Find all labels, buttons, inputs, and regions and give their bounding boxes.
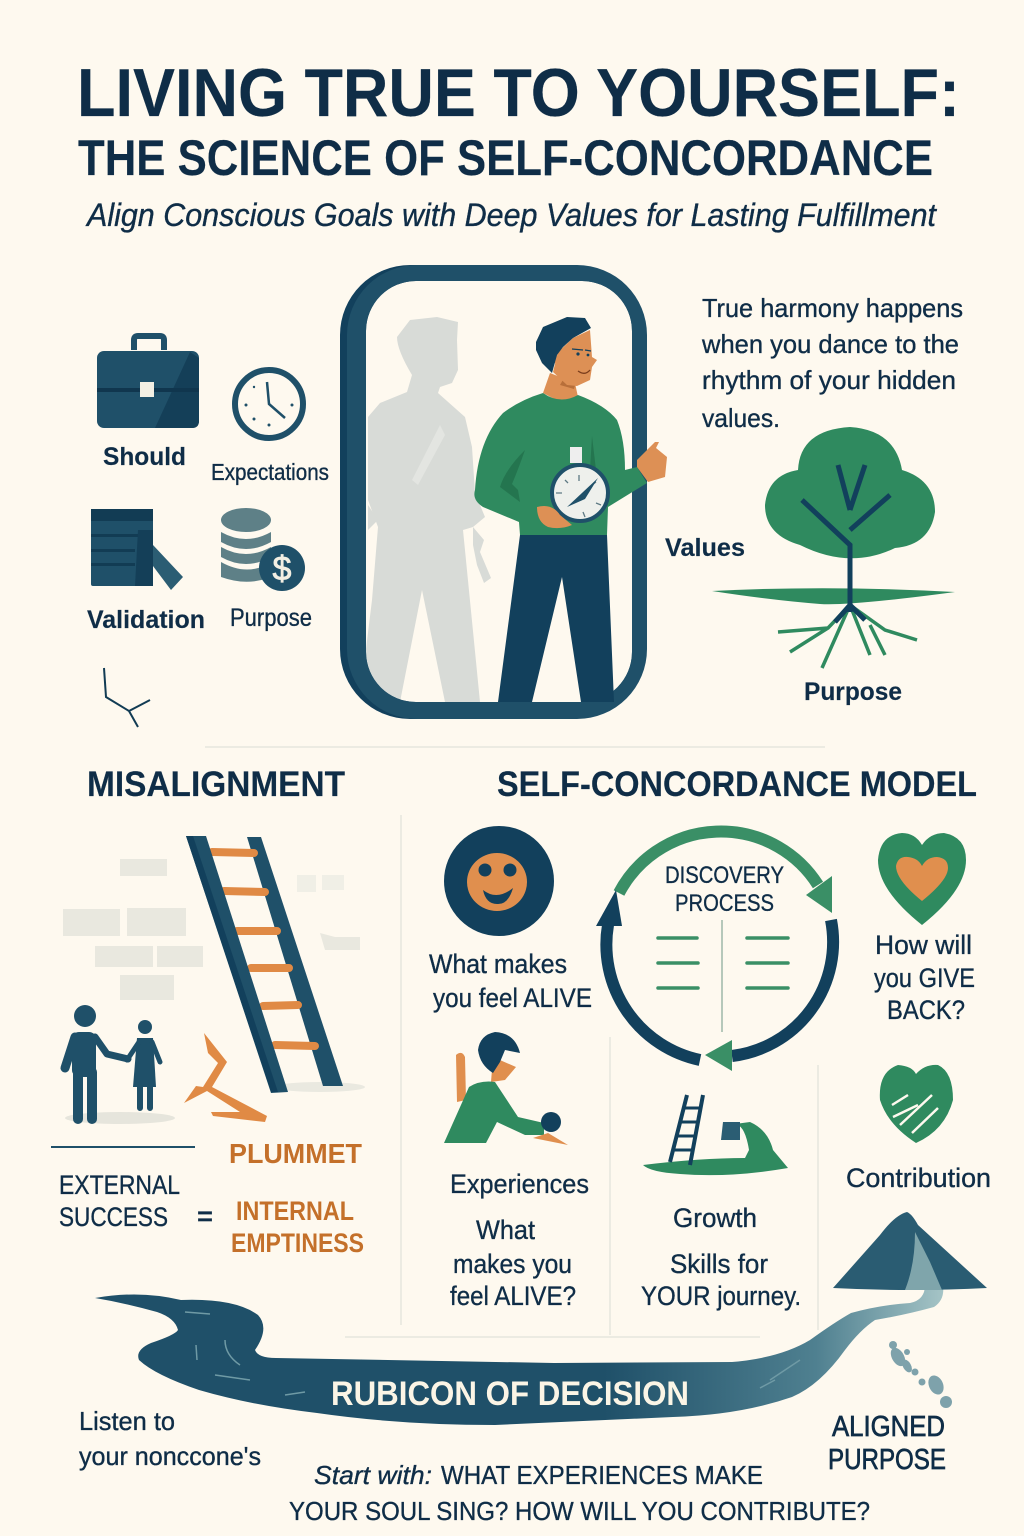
closing prompt: Start with: [314, 1460, 432, 1490]
equation: external success equals internal emptiness [51, 1138, 364, 1258]
discovery cycle [596, 831, 833, 1071]
label: validation: Validation [87, 606, 205, 634]
river: rubicon of decision [95, 1285, 943, 1425]
label: aligned purpose: ALIGNED [832, 1411, 945, 1443]
title: LIVING TRUE TO YOURSELF: [77, 55, 960, 131]
text: what makes you feel alive: What makes [429, 949, 567, 979]
text: how will you give back: you GIVE [874, 963, 975, 993]
icon: briefcase [97, 336, 199, 428]
icon: people holding hands [65, 1005, 175, 1124]
icon: crack [104, 668, 150, 727]
mirror frame [340, 265, 647, 719]
text: harmony quote [701, 293, 963, 433]
text: growth [641, 1203, 801, 1311]
sweater [474, 393, 647, 535]
icon: person exploring [444, 1032, 568, 1145]
equation: external success equals internal emptiness: INTERNAL [236, 1196, 354, 1226]
discovery cycle: DISCOVERY [665, 862, 784, 889]
icon: tree with roots [712, 427, 955, 668]
river: rubicon of decision: RUBICON OF DECISION [331, 1375, 689, 1413]
text: listen to your nonccone's: Listen to [79, 1406, 175, 1436]
icon: ladder [186, 836, 365, 1093]
text: experiences: What [476, 1215, 535, 1245]
icon: mountain [833, 1212, 987, 1290]
text: harmony quote: when you dance to the [701, 329, 959, 359]
icon: validation document [91, 509, 183, 590]
heading: model: SELF-CONCORDANCE MODEL [497, 765, 977, 804]
text: experiences: feel ALIVE? [450, 1281, 576, 1311]
text: what makes you feel alive: you feel ALIVE [433, 983, 592, 1013]
icon: caring hands [880, 1065, 953, 1143]
label: aligned purpose: PURPOSE [828, 1444, 946, 1476]
man [474, 317, 667, 702]
mirror with figures [340, 265, 667, 719]
subtitle: Align Conscious Goals with Deep Values for Lasting Fulfillment [85, 197, 937, 233]
equation: external success equals internal emptiness: EXTERNAL [59, 1170, 180, 1200]
icon: coins: $ [273, 550, 292, 588]
text: experiences [450, 1169, 589, 1311]
label: should: Should [103, 443, 186, 471]
compass [570, 447, 582, 463]
blue arcs [732, 920, 833, 1056]
heading: misalignment: MISALIGNMENT [87, 765, 345, 804]
text: listen to your nonccone's [79, 1406, 261, 1471]
text: harmony quote: values. [702, 403, 780, 433]
text: growth: YOUR journey. [641, 1281, 801, 1311]
icon: footprints [888, 1341, 952, 1408]
text: growth: Growth [673, 1203, 757, 1233]
text: what makes you feel alive [429, 949, 592, 1013]
equation: external success equals internal emptiness: SUCCESS [59, 1202, 168, 1232]
open book lines [721, 920, 723, 1032]
label: purpose (tree): Purpose [804, 678, 902, 706]
text: experiences: Experiences [450, 1169, 589, 1199]
label: aligned purpose [828, 1411, 946, 1476]
closing prompt: YOUR SOUL SING? HOW WILL YOU CONTRIBUTE? [289, 1496, 870, 1526]
ghost reflection [365, 317, 491, 702]
label: purpose (left): Purpose [230, 604, 312, 632]
text: listen to your nonccone's: your nonccone's [79, 1441, 261, 1471]
icon: smiley [444, 826, 554, 936]
label: contribution: Contribution [846, 1163, 991, 1193]
discovery cycle: PROCESS [675, 890, 774, 917]
faded bricks [63, 859, 360, 1000]
icon: coins [221, 508, 305, 591]
icon: clock [235, 370, 303, 438]
title [77, 55, 960, 186]
icon: broken arrow [184, 1033, 267, 1122]
text: harmony quote: True harmony happens [702, 293, 963, 323]
closing prompt: WHAT EXPERIENCES MAKE [441, 1460, 763, 1490]
text: how will you give back: How will [875, 930, 972, 960]
closing prompt [289, 1460, 870, 1526]
dividers [205, 747, 825, 1337]
label: expectations: Expectations [211, 459, 329, 485]
fist [637, 442, 667, 482]
icon: heart [878, 833, 966, 925]
text: experiences: makes you [453, 1249, 572, 1279]
equation: external success equals internal emptiness: PLUMMET [229, 1138, 362, 1169]
text: growth: Skills for [670, 1249, 768, 1279]
equation: external success equals internal emptiness: = [197, 1201, 213, 1231]
label: values: Values [665, 534, 745, 562]
icon: ladder on hill [643, 1095, 788, 1175]
trousers [498, 535, 614, 702]
green arc [619, 831, 818, 893]
text: how will you give back: BACK? [887, 995, 965, 1025]
equation: external success equals internal emptiness: EMPTINESS [231, 1228, 364, 1258]
text: harmony quote: rhythm of your hidden [702, 365, 956, 395]
text: how will you give back [874, 930, 975, 1025]
